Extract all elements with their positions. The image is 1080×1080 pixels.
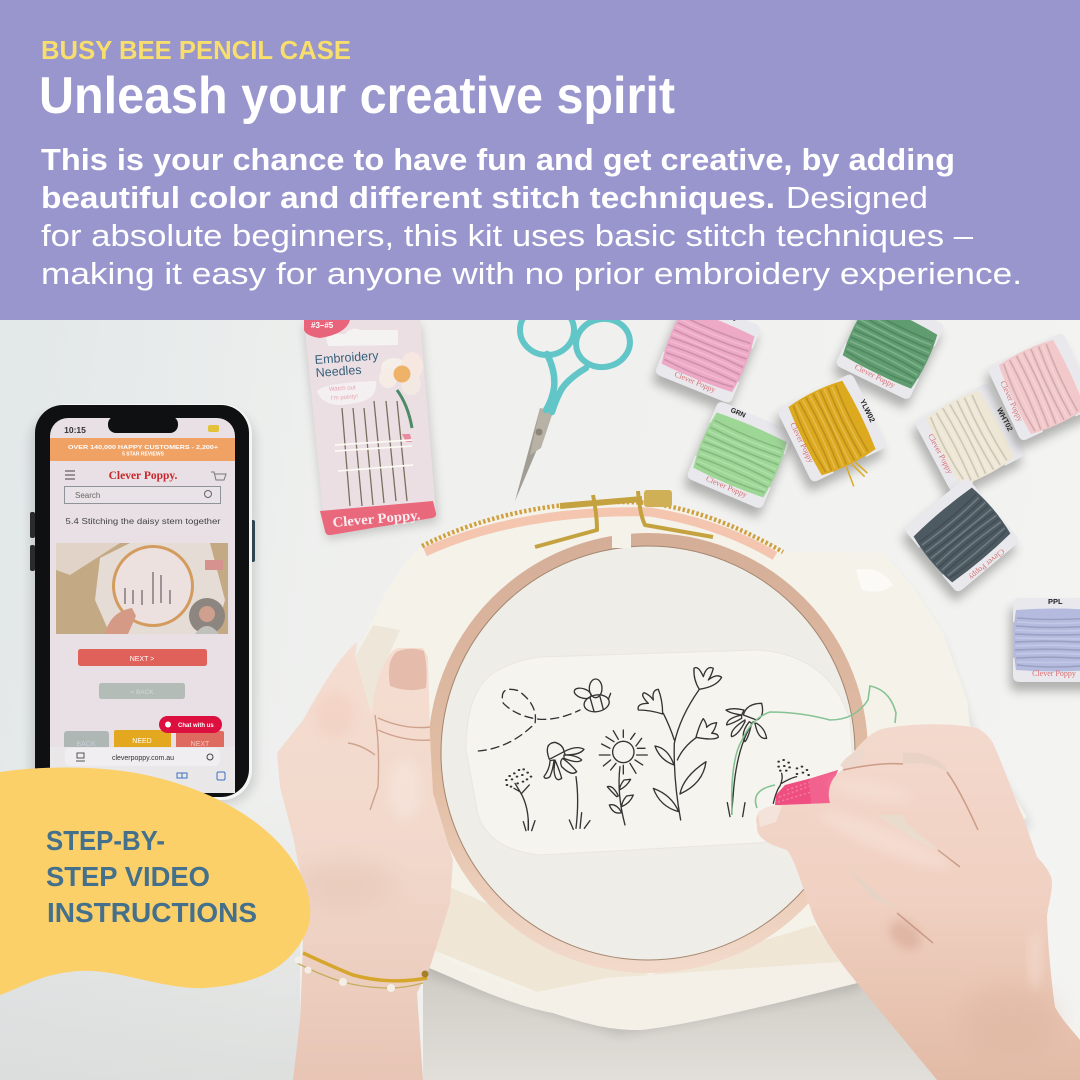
- body text: Designed: [786, 180, 928, 215]
- phone screen: 5.4 Stitching the daisy stem together: [66, 517, 221, 526]
- bee: [573, 679, 611, 714]
- drooping daisy: [544, 742, 590, 829]
- wooden hoop with fabric: [434, 526, 862, 966]
- phone screen: 5 STAR REVIEWS: [122, 452, 165, 458]
- small corner tuck: [856, 569, 893, 592]
- lower band: [427, 950, 857, 1030]
- brand band: [320, 501, 436, 535]
- lesson video thumbnail: [56, 543, 228, 634]
- needles: [342, 401, 407, 506]
- body text: [41, 142, 1022, 291]
- yellow callout blob: [0, 768, 310, 995]
- back button: < BACK: [130, 689, 154, 696]
- thread bobbin: charcoal: [901, 476, 1021, 603]
- thread bobbin: yellow: YLW02: [858, 398, 877, 424]
- callout text: [46, 825, 257, 928]
- thread bobbin: yellow: [773, 372, 899, 502]
- dotted flower: [506, 769, 535, 831]
- callout text: INSTRUCTIONS: [47, 897, 257, 928]
- phone screen: [50, 416, 235, 793]
- tall flower: [638, 668, 722, 820]
- thread bobbin: light green: [683, 400, 794, 519]
- photo background: [0, 320, 1080, 1080]
- speech bubble: I'm pointy!: [331, 394, 359, 402]
- chat button: Chat with us: [178, 723, 214, 729]
- bottom lesson buttons: NEXT: [191, 741, 210, 748]
- thread bobbin: dark green: Clever Poppy: [853, 362, 897, 390]
- interior cream fold: [433, 885, 840, 992]
- teal scissors: [515, 305, 634, 501]
- title: Unleash your creative spirit: [39, 67, 675, 125]
- pink thimble: [775, 770, 838, 805]
- thread bobbin: soft pink: [984, 332, 1080, 451]
- thread bobbin: pink: Clever Poppy: [673, 370, 717, 394]
- body text: for absolute beginners, this kit uses basic stitch techniques –: [41, 218, 974, 253]
- pack heading: Needles: [315, 363, 362, 380]
- fabric fold by thumb: [355, 625, 400, 715]
- body text: This is your chance to have fun and get creative, by adding: [41, 142, 955, 177]
- phone screen: Search: [75, 491, 100, 500]
- body text: beautiful color and different stitch techniques.: [41, 180, 775, 215]
- browser address bar: cleverpoppy.com.au: [112, 755, 174, 762]
- back button: [99, 683, 185, 699]
- thread bobbin: lavender: Clever Poppy: [1032, 669, 1076, 678]
- header panel: [0, 0, 1080, 320]
- speech bubble: Watch out: [329, 385, 356, 393]
- stabilizer patch with flower pattern: [466, 650, 896, 855]
- next button: NEXT >: [130, 656, 154, 663]
- right hand: [756, 724, 1080, 1080]
- thread bobbin: yellow: Clever Poppy: [788, 421, 816, 464]
- gold bracelet: [294, 953, 428, 992]
- dashed bee trail: [478, 689, 580, 751]
- thread bobbin: pink: [651, 296, 762, 413]
- thread bobbin: lavender: [1010, 597, 1080, 691]
- embroidery needles pack: [304, 320, 438, 539]
- browser address bar: [65, 748, 220, 766]
- thread bobbin: pink: PNK06: [714, 308, 737, 323]
- chat button: [159, 716, 222, 733]
- thread bobbin: lavender: PPL: [1048, 597, 1063, 606]
- hoop opening: [612, 526, 631, 548]
- canvas pencil case: [355, 501, 1032, 1036]
- next button: [78, 649, 207, 666]
- pack heading: [314, 349, 380, 380]
- bottom lesson buttons: NEED: [132, 738, 152, 745]
- second dotted flower: [773, 760, 809, 803]
- sun flower: [599, 730, 647, 825]
- thumbnail: [389, 649, 427, 690]
- bottom lesson buttons: [64, 730, 224, 751]
- fabric gaps between fingers: [877, 815, 938, 850]
- callout text: STEP-BY-: [46, 825, 165, 856]
- thread bobbin: cream: [911, 381, 1028, 503]
- fingernails: [758, 806, 782, 827]
- hang slot: [325, 329, 398, 346]
- printed flowers and bee drawing: [478, 668, 809, 831]
- phone with video lesson: [30, 404, 256, 804]
- thread bobbin: charcoal: Clever Poppy: [967, 547, 1006, 582]
- left hand: [277, 642, 453, 1080]
- eyebrow: BUSY BEE PENCIL CASE: [41, 35, 351, 65]
- brass hoop screw: [535, 490, 713, 547]
- green thread: [732, 686, 896, 815]
- pack heading: Embroidery: [314, 349, 380, 367]
- zipper: [422, 502, 783, 556]
- size tag: [304, 320, 350, 338]
- knuckle creases: [348, 715, 430, 810]
- phone screen: 10:15: [64, 425, 86, 435]
- brand band: Clever Poppy.: [332, 508, 421, 531]
- thread bobbin: cream: Clever Poppy: [926, 432, 955, 475]
- thread bobbin: light green: GRN: [729, 407, 746, 420]
- size tag: #3–#5: [311, 321, 334, 330]
- body text: making it easy for anyone with no prior embroidery experience.: [41, 256, 1022, 291]
- thread bobbin: cream: WHT02: [995, 406, 1015, 433]
- phone screen: OVER 140,000 HAPPY CUSTOMERS - 2,200+: [68, 445, 219, 451]
- thread bobbin: dark green: [832, 289, 945, 410]
- thread bobbin: light green: Clever Poppy: [705, 474, 748, 499]
- daisy character: [379, 352, 423, 442]
- finger creases: [843, 764, 978, 943]
- bottom lesson buttons: BACK: [76, 741, 96, 748]
- phone screen: Clever Poppy.: [109, 470, 178, 482]
- speech bubble: [317, 381, 376, 405]
- callout text: STEP VIDEO: [46, 861, 210, 892]
- stitched daisy: [726, 703, 767, 817]
- thread bobbin: soft pink: Clever Poppy: [998, 379, 1025, 423]
